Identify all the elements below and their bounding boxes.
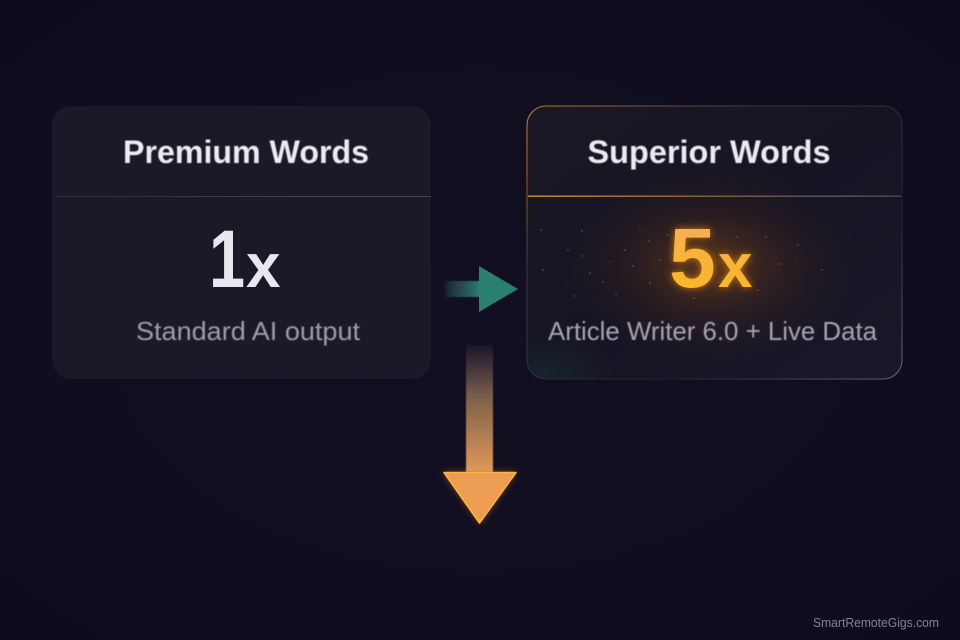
panel: superior words xyxy=(526,106,902,380)
caption: standard ai output: Standard AI output xyxy=(136,316,361,346)
arrow glow xyxy=(443,472,516,524)
caption: article writer: Article Writer 6.0 + Live Data xyxy=(548,316,878,346)
multiplier: 1x: x xyxy=(246,232,281,301)
multiplier glow: x xyxy=(718,232,753,301)
multiplier: 5x: 5 xyxy=(669,211,716,305)
arrow head xyxy=(444,472,516,523)
watermark: SmartRemoteGigs.com xyxy=(813,616,939,630)
multiplier glow: 5 xyxy=(669,211,716,305)
card glow xyxy=(528,194,817,378)
arrow: right green xyxy=(443,266,518,312)
arrow shaft xyxy=(466,345,493,472)
divider: premium xyxy=(56,196,431,197)
card background: superior xyxy=(527,106,902,379)
multiplier: 1x xyxy=(209,214,281,305)
divider: superior xyxy=(528,196,901,197)
heading: premium words: Premium Words xyxy=(123,134,369,170)
multiplier: 1x: 1 xyxy=(209,214,245,305)
multiplier: 5x: x xyxy=(718,232,753,301)
particles xyxy=(540,229,823,299)
heading: superior words: Superior Words xyxy=(588,134,830,170)
card background: premium xyxy=(52,106,431,379)
arrow: down orange xyxy=(443,345,516,524)
panel: premium words xyxy=(52,106,431,379)
